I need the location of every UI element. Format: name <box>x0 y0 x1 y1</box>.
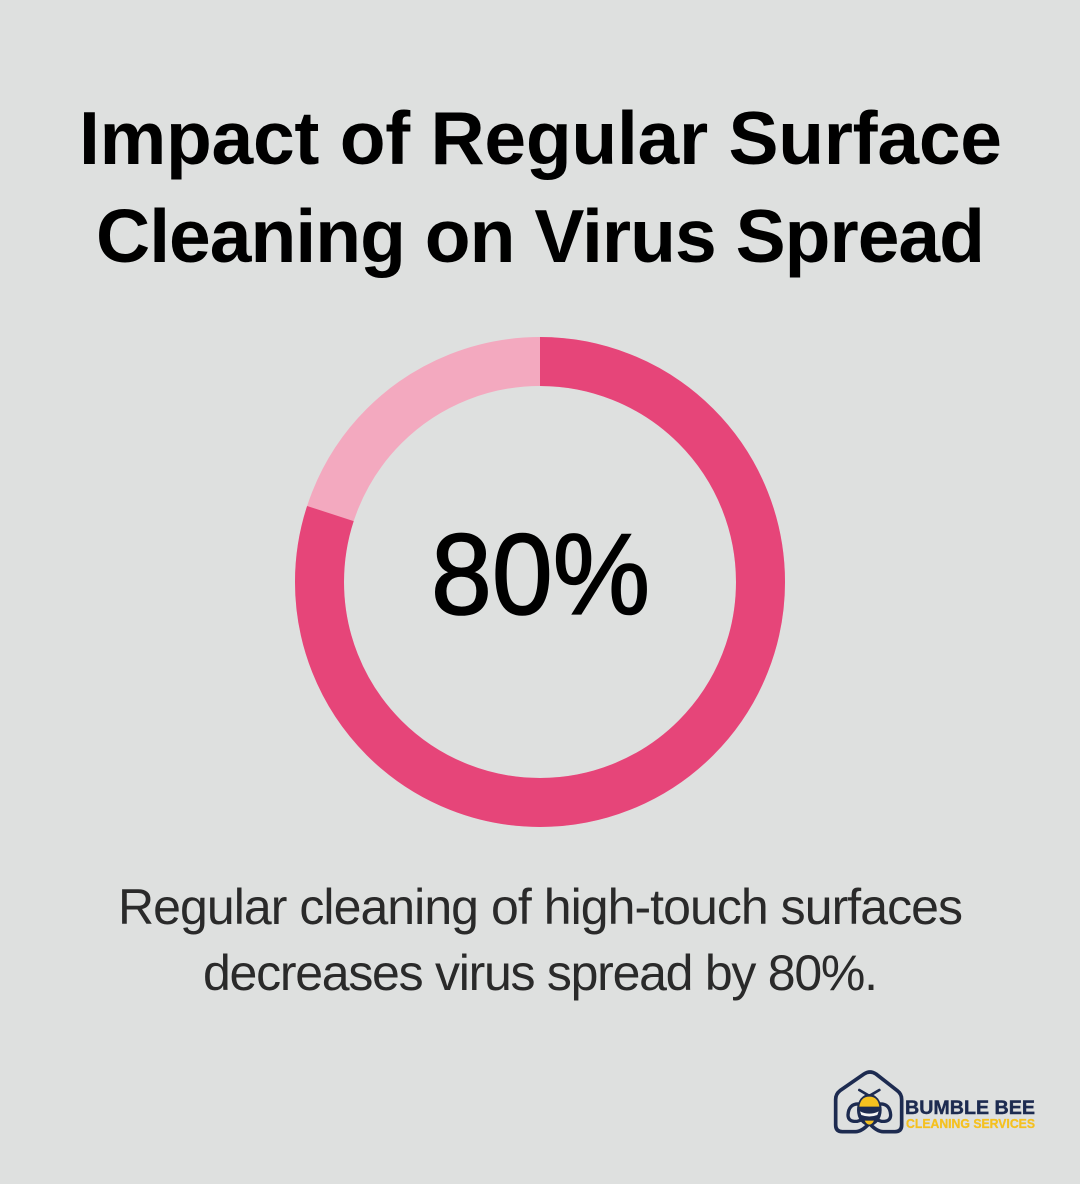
icon: house with bee <box>836 1072 902 1132</box>
logo: Bumble Bee Cleaning Services <box>836 1072 1035 1132</box>
logo wordmark: BUMBLE BEE <box>905 1098 1035 1119</box>
description text <box>118 879 963 1001</box>
title: Impact of Regular Surface <box>79 96 1002 180</box>
description text: decreases virus spread by 80%. <box>203 945 878 1001</box>
logo tagline: CLEANING SERVICES <box>906 1116 1035 1131</box>
donut value: 80% <box>431 511 650 639</box>
donut chart: 80% <box>320 362 760 802</box>
title: Cleaning on Virus Spread <box>96 194 985 278</box>
description text: Regular cleaning of high-touch surfaces <box>118 879 963 935</box>
title <box>79 96 1002 278</box>
